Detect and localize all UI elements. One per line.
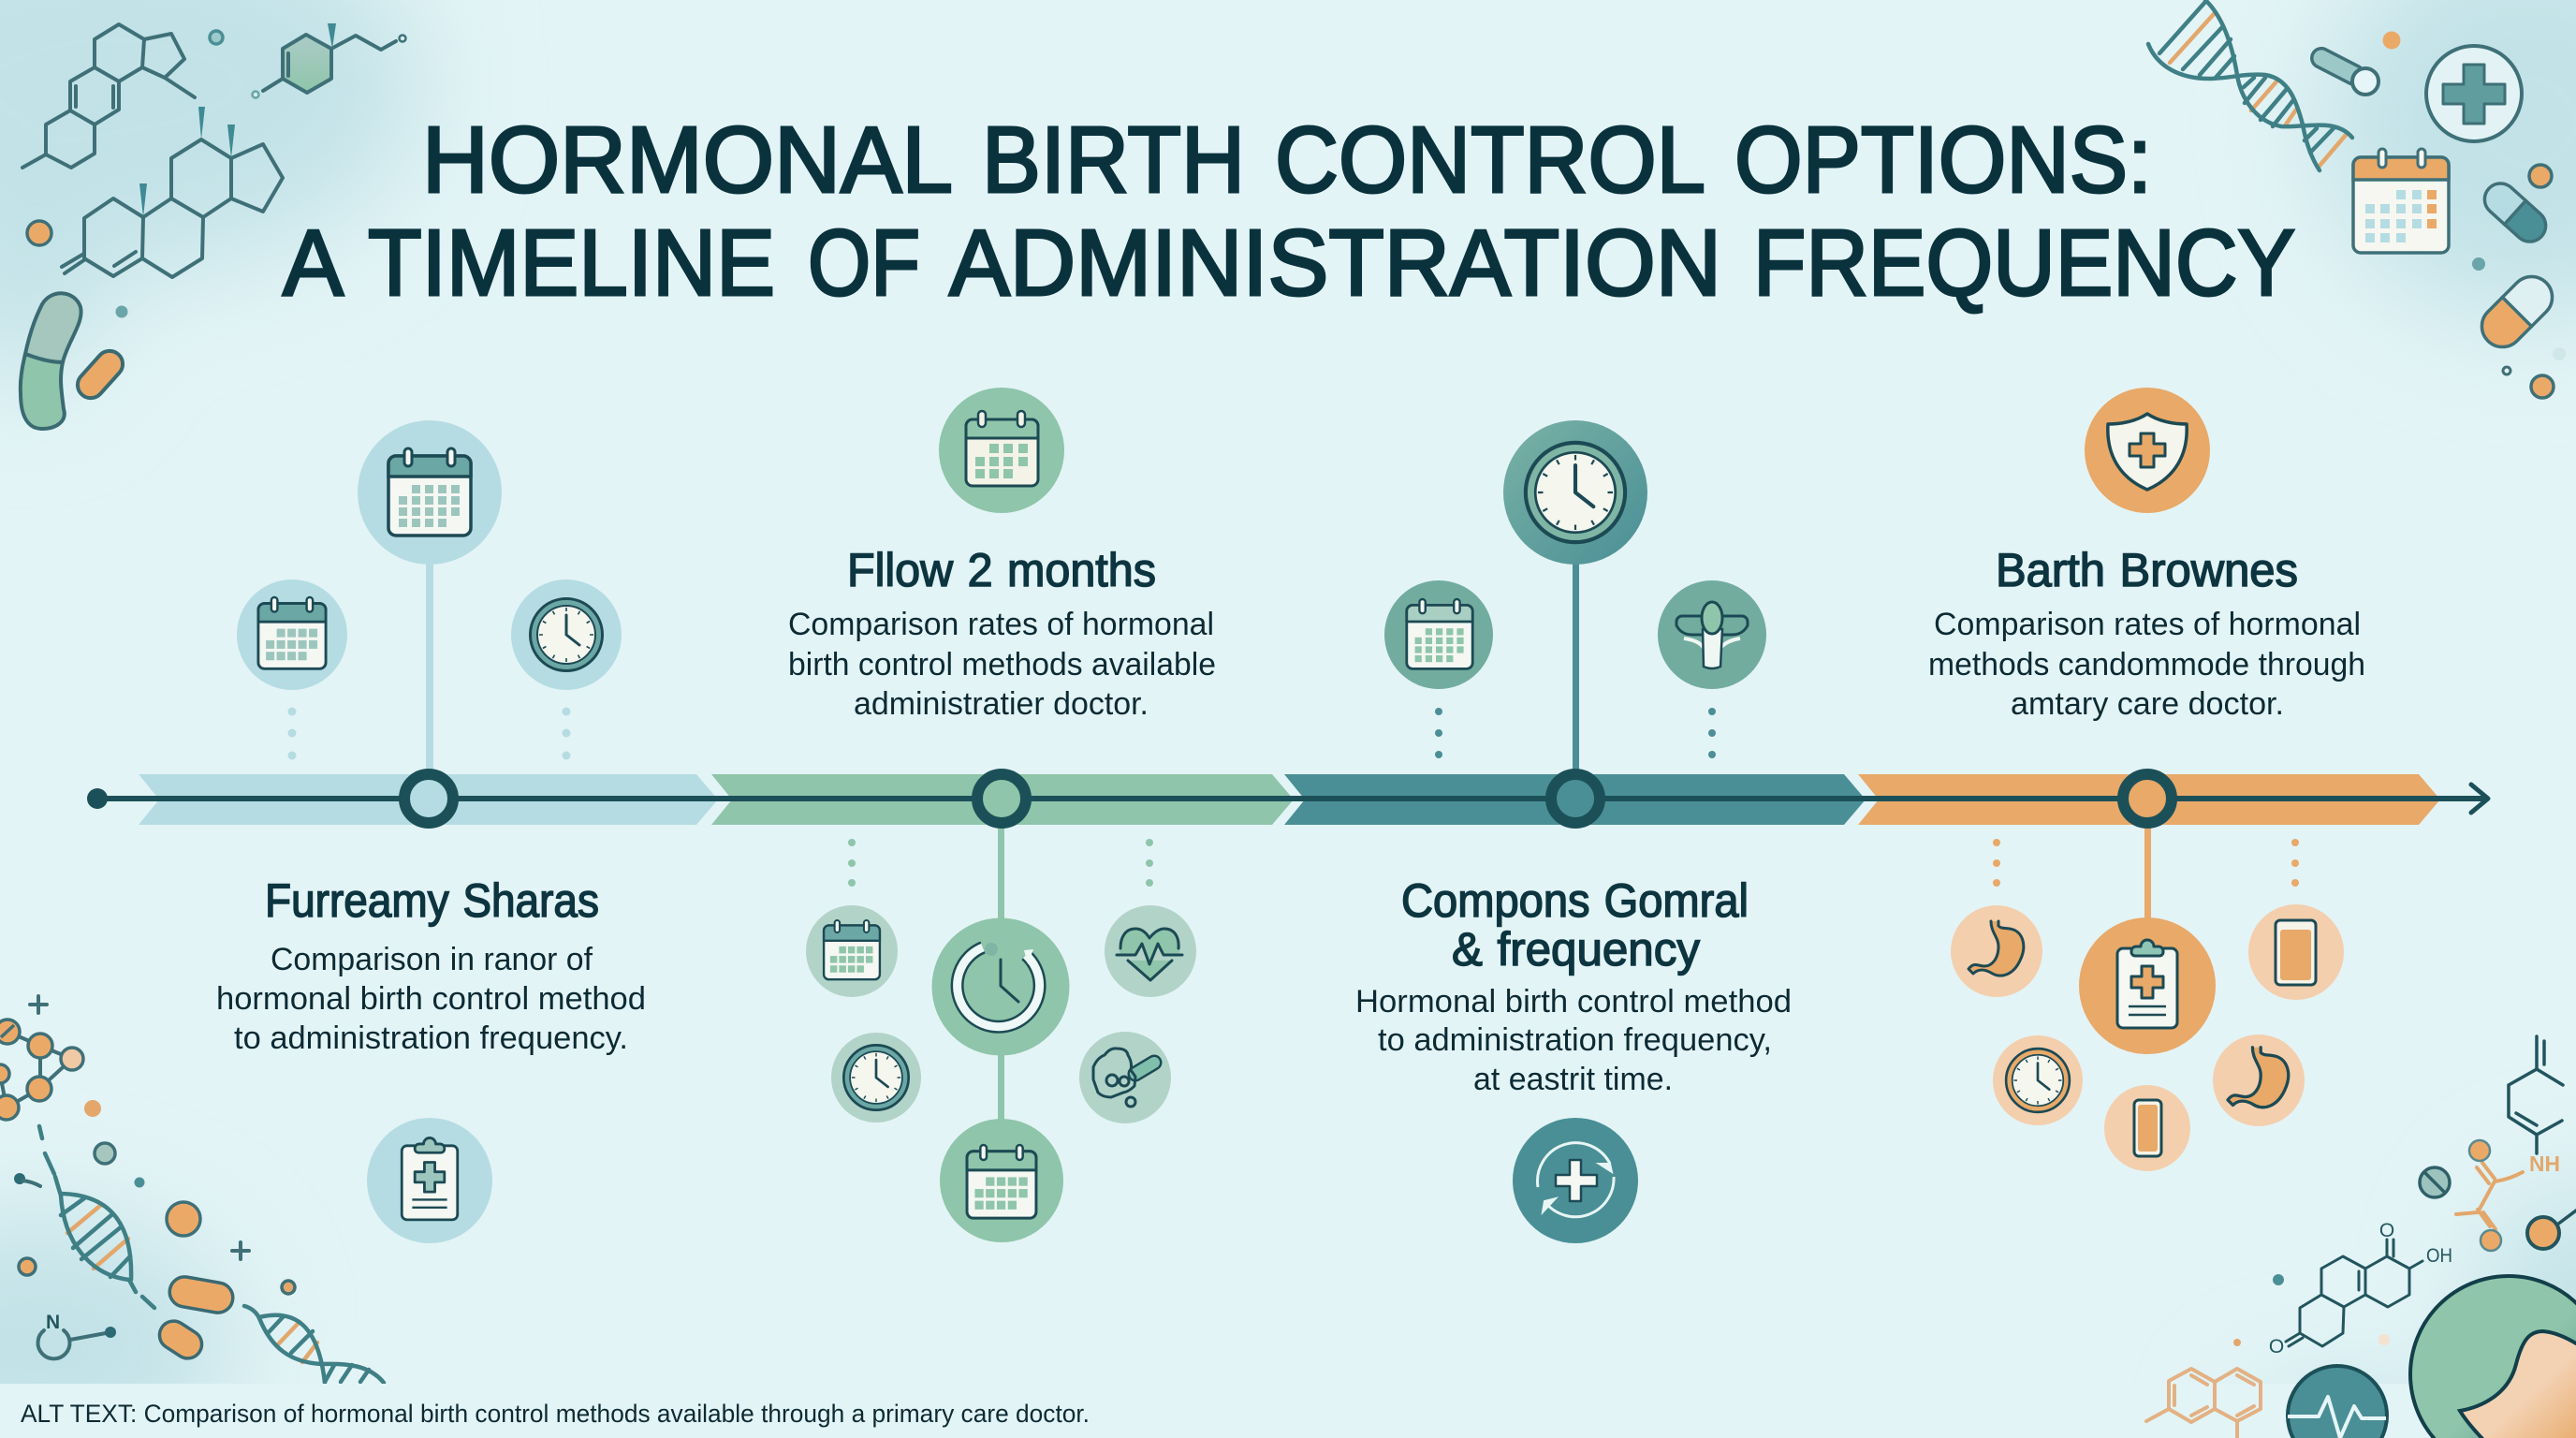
description: methods candommode through xyxy=(1928,647,2365,682)
molecule: orange nodes xyxy=(0,1020,83,1120)
molecule: upper steroid xyxy=(22,24,195,168)
footer band xyxy=(0,1384,2576,1438)
icon: small calendar xyxy=(1384,580,1493,689)
connector stem xyxy=(426,562,433,772)
timeline node xyxy=(1551,774,1600,823)
dotted connectors xyxy=(288,708,571,760)
description: Comparison rates of hormonal xyxy=(788,607,1214,642)
description xyxy=(216,942,646,1056)
molecule: orange chain xyxy=(2456,1140,2576,1251)
panel: stage 4 xyxy=(1928,388,2365,1171)
heading: Fllow 2 months xyxy=(847,544,1156,596)
heading: Barth Brownes xyxy=(1996,544,2298,596)
icon: main calendar xyxy=(358,420,502,565)
icon: clock xyxy=(831,1033,921,1123)
icon: cycle clock xyxy=(932,917,1069,1056)
icon: medical cross xyxy=(2426,46,2522,141)
decoration: bottom-right molecules and sphere xyxy=(2146,1036,2576,1438)
heading xyxy=(1401,874,1749,976)
molecule: N ring xyxy=(37,1312,116,1358)
title: A xyxy=(283,211,344,315)
icon: clock xyxy=(1993,1035,2083,1125)
description: administratier doctor. xyxy=(854,686,1149,722)
dotted connectors xyxy=(1435,708,1716,758)
description: at eastrit time. xyxy=(1473,1062,1673,1097)
timeline node xyxy=(977,774,1026,823)
icon: uterus shape xyxy=(1658,580,1766,689)
icon: phone xyxy=(2248,904,2344,1000)
molecule: tricyclic with OH: OH xyxy=(2426,1245,2452,1267)
title: ADMINISTRATION xyxy=(949,211,1721,315)
description: Comparison rates of hormonal xyxy=(1934,607,2361,642)
description: Hormonal birth control method xyxy=(1355,984,1792,1020)
alt text footer: ALT TEXT: Comparison of hormonal birth control methods available through a primary care doctor. xyxy=(21,1400,1090,1428)
swab xyxy=(2321,58,2378,95)
icon: stomach xyxy=(1951,905,2042,997)
decoration: top-right DNA and pills xyxy=(2148,0,2566,398)
description xyxy=(788,607,1216,722)
molecule: tricyclic with OH: O xyxy=(2269,1336,2284,1357)
icon: bottom calendar xyxy=(940,1119,1063,1242)
description: hormonal birth control method xyxy=(216,981,646,1017)
title: FREQUENCY xyxy=(1753,211,2295,315)
DNA helix left xyxy=(39,1126,154,1308)
timeline axis arrow xyxy=(87,785,2488,813)
icon: clipboard xyxy=(367,1118,492,1243)
description: to administration frequency. xyxy=(234,1020,628,1056)
molecule: orange naphthalene xyxy=(2146,1369,2261,1438)
molecule: filled hexagon xyxy=(253,23,406,97)
icon: orange calendar xyxy=(2353,149,2449,253)
description xyxy=(1928,607,2365,722)
dotted connectors xyxy=(848,839,1153,887)
heading: & frequency xyxy=(1452,923,1700,976)
molecule: lower steroid xyxy=(62,107,283,277)
pill: orange xyxy=(2473,268,2561,356)
connector stem xyxy=(2144,824,2151,927)
icon: clipboard xyxy=(2079,917,2216,1054)
DNA helix lower xyxy=(244,1306,384,1383)
timeline node xyxy=(2123,774,2172,823)
icon: top calendar xyxy=(939,388,1064,513)
dotted connectors xyxy=(1993,839,2299,887)
title: BIRTH xyxy=(982,108,1245,213)
description: Comparison in ranor of xyxy=(271,942,593,977)
description: amtary care doctor. xyxy=(2011,686,2284,722)
icon: shield xyxy=(2085,388,2210,513)
connector stem xyxy=(998,824,1004,1123)
molecule: tricyclic with OH xyxy=(2269,1220,2452,1357)
heading: Furreamy Sharas xyxy=(265,874,599,927)
sphere xyxy=(2410,1276,2576,1438)
capsule: large curved xyxy=(21,293,81,429)
molecule: dark upper right xyxy=(2509,1036,2563,1153)
dots xyxy=(210,31,223,44)
title: TIMELINE xyxy=(368,211,775,315)
DNA helix xyxy=(2148,0,2352,170)
capsule: orange xyxy=(72,345,128,404)
connector stem xyxy=(1573,562,1579,772)
icon: blob and pill xyxy=(1079,1032,1171,1123)
decoration: bottom-left molecules and DNA xyxy=(0,996,384,1383)
molecule: orange chain: NH xyxy=(2529,1152,2560,1176)
capsules xyxy=(168,1274,235,1315)
title: CONTROL xyxy=(1275,108,1705,213)
icon: small calendar xyxy=(806,905,898,997)
icon: big clock xyxy=(1503,420,1647,565)
heading: Compons Gomral xyxy=(1401,874,1749,927)
icon: small phone xyxy=(2104,1085,2190,1171)
icon: small calendar xyxy=(237,580,347,690)
pulse circle xyxy=(2288,1366,2387,1438)
icon: small clock xyxy=(511,580,622,690)
panel: stage 2 xyxy=(788,388,1216,1242)
molecule: N ring: N xyxy=(46,1312,60,1333)
icon: stomach xyxy=(2213,1034,2305,1126)
title: OPTIONS: xyxy=(1734,108,2152,213)
icon: repeat cross xyxy=(1513,1118,1638,1243)
description xyxy=(1355,984,1792,1097)
panel: stage 3 xyxy=(1355,420,1792,1243)
timeline bar segments xyxy=(139,774,2440,825)
title: HORMONAL xyxy=(422,108,953,213)
icon: heart rate xyxy=(1105,905,1196,997)
title: OF xyxy=(808,211,920,315)
pill: teal xyxy=(2478,177,2553,248)
panel: stage 1 xyxy=(216,420,646,1243)
pill: slashed xyxy=(2420,1167,2450,1197)
timeline node xyxy=(404,774,453,823)
description: birth control methods available xyxy=(788,647,1216,682)
decoration: top-left molecules and capsules xyxy=(21,23,406,429)
molecule: tricyclic with OH: O xyxy=(2379,1220,2394,1241)
title xyxy=(283,108,2295,315)
description: to administration frequency, xyxy=(1378,1022,1772,1058)
